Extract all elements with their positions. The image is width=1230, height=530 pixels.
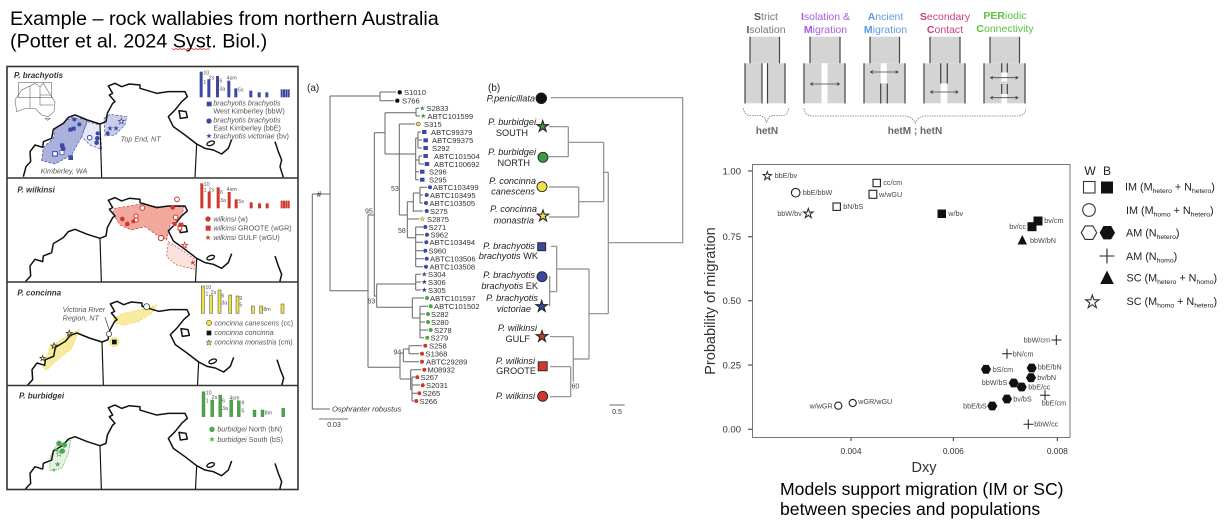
legend: wilkinsi: wilkinsi GULF (wGU) — [213, 234, 280, 242]
legend row: AM homo: AM (N — [1126, 251, 1157, 263]
tip labels: S2833 — [426, 104, 448, 113]
point labels: bbE/bbW — [803, 188, 832, 197]
markers: open circles — [791, 188, 856, 409]
y axis ticks — [722, 166, 752, 436]
point labels: w/wGR — [809, 402, 833, 410]
species labels: P. concinna — [490, 204, 537, 214]
legend: burbidgei: burbidgei North (bN) — [217, 426, 282, 434]
karyotype bars: brachyotis — [200, 71, 290, 97]
panel: (a) individual phylogeny — [307, 83, 480, 429]
tip labels: ABTC103506 — [430, 254, 476, 264]
y axis ticks: 0.00 — [722, 425, 741, 436]
panel: P. concinna map — [17, 285, 293, 395]
tip labels: S2031 — [426, 381, 448, 390]
legend row: SC homo hetero: + N — [1174, 296, 1194, 308]
point labels: bbE/bv — [775, 171, 797, 180]
tip labels — [332, 88, 480, 414]
karyotype bars: brachyotis: 3a — [219, 87, 225, 93]
support value: 60 — [572, 384, 579, 390]
legend row: SC homo hetero: SC (M — [1126, 296, 1157, 308]
bootstrap values: 53 — [391, 186, 399, 193]
diagram: ancient migration — [864, 37, 905, 104]
scale bar: 0.5 — [612, 409, 622, 416]
point labels: bbW/cc — [1034, 420, 1059, 428]
species labels: brachyotis EK — [481, 281, 539, 291]
tip labels: S266 — [420, 397, 437, 406]
long-branch break marks: # — [317, 190, 322, 199]
point labels: bbE/bN — [1038, 362, 1062, 372]
legend row: AM hetero: AM (N — [1126, 228, 1157, 240]
point labels: bbW/bN — [1030, 236, 1056, 245]
tip markers: bbW squares — [420, 130, 429, 182]
heading: Ancient Migration: Ancient — [868, 11, 903, 23]
tip labels: S2875 — [427, 215, 449, 224]
markers: plus signs — [1002, 335, 1062, 429]
markers: filled squares — [938, 210, 1042, 231]
legend: concinna: concinna canescens (cc) — [214, 319, 293, 327]
species tree branches — [549, 98, 683, 397]
species labels: canescens — [491, 186, 535, 196]
heading: Isolation and Migration: Isolation & — [801, 11, 850, 23]
legend: brachyotis — [206, 100, 289, 141]
inset map of Australia — [15, 83, 55, 120]
tip labels: S1010 — [404, 88, 426, 97]
species labels: P. burbidgei — [488, 117, 537, 127]
karyotype bars: concinna: 6 — [221, 293, 224, 299]
y axis title: Probability of migration — [703, 227, 719, 375]
heading: Secondary Contact: Secondary — [920, 11, 970, 23]
bootstrap values: 95 — [365, 208, 373, 216]
karyotype bars: wilkinsi: 4sm — [227, 187, 237, 193]
species labels: P. wilkinsi — [498, 323, 538, 333]
karyotype bars: burbidgei: 5 — [241, 408, 244, 414]
karyotype bars: brachyotis: 2s — [209, 75, 215, 81]
point labels: bv/bS — [1013, 394, 1032, 404]
bootstrap values: 63 — [368, 298, 375, 306]
caption: Models support migration (IM or SC) — [780, 479, 1064, 499]
tip labels: ABTC103505 — [430, 199, 475, 208]
legend: wilkinsi: wilkinsi (w) — [213, 215, 248, 223]
karyotype bars: burbidgei: 10 — [206, 391, 212, 397]
legend: brachyotis: brachyotis victoriae (bv) — [213, 133, 289, 141]
species name: P. wilkinsi — [17, 186, 56, 195]
point labels: bv/cc — [1009, 222, 1026, 231]
heading: Isolation and Migration: Migration — [804, 24, 847, 36]
diagram: secondary contact — [924, 37, 965, 104]
tip labels: S296 — [429, 168, 447, 176]
panel: (b) species tree — [479, 83, 683, 416]
tip labels: S282 — [431, 310, 449, 319]
map label: Kimberley: Kimberley, WA — [41, 167, 88, 175]
legend: concinna: concinna monastria (cm) — [214, 339, 293, 347]
species labels: P. wilkinsi — [496, 391, 536, 401]
legend: concinna: concinna concinna — [214, 329, 274, 337]
markers: open stars — [763, 172, 813, 218]
point labels: w/wGU — [878, 190, 902, 199]
brace: hetM hetN — [804, 108, 1026, 123]
tip labels: ABTC101597 — [430, 294, 476, 303]
panel: divergence scenario diagrams — [744, 10, 1034, 137]
point labels: bS/cm — [993, 365, 1013, 374]
species labels: P. burbidgei — [488, 147, 537, 157]
legend row: IM hetero hetero: hetero — [1192, 188, 1211, 195]
tip labels: ABTC99379 — [431, 128, 472, 137]
legend row: SC hetero homo: ) — [1214, 273, 1217, 285]
legend row: SC homo hetero: homo — [1157, 302, 1174, 310]
panel letter a: (a) — [307, 83, 319, 94]
species labels: P. brachyotis — [483, 270, 535, 280]
y axis ticks: 1.00 — [722, 166, 741, 178]
species labels: brachyotis WK — [479, 251, 539, 261]
tip labels: ABTC99375 — [432, 136, 473, 145]
legend: concinna — [206, 319, 293, 347]
tip labels: ABTC103494 — [430, 238, 475, 247]
tip labels: S258 — [429, 342, 447, 350]
legend: brachyotis: East Kimberley (bbE) — [213, 125, 281, 133]
tip labels: S960 — [428, 246, 446, 256]
legend row: SC hetero homo: SC (M — [1126, 273, 1157, 285]
legend: wilkinsi — [205, 215, 292, 242]
karyotype bars: concinna: 10 — [205, 285, 211, 291]
legend row: IM hetero hetero: IM (M — [1125, 182, 1153, 194]
tip labels: ABTC103495 — [430, 191, 476, 200]
karyotype bars: wilkinsi: 10 — [204, 182, 210, 188]
species name: P. burbidgei — [19, 391, 65, 400]
tip labels: ABTC100692 — [434, 160, 480, 169]
tip labels: S295 — [429, 176, 447, 184]
tip labels: S304 — [428, 270, 446, 279]
scale bar — [319, 419, 348, 429]
tip markers: burbidgei north — [425, 296, 433, 340]
scale bar: 0.03 — [327, 422, 341, 429]
legend row: AM homo — [1100, 248, 1177, 264]
tip labels: ABTC103508 — [430, 262, 475, 272]
legend row: SC hetero homo: hetero — [1157, 279, 1177, 286]
point labels: bv/cm — [1044, 216, 1063, 225]
karyotype bars: burbidgei: 4sm — [229, 395, 240, 401]
legend row: IM homo hetero: hetero — [1191, 212, 1210, 218]
species labels: SOUTH — [496, 128, 528, 138]
x axis ticks: 0.008 — [1047, 446, 1068, 456]
panel: species distribution maps — [7, 66, 298, 499]
legend: brachyotis: brachyotis brachyotis — [213, 100, 281, 108]
karyotype bars: concinna: 9 — [239, 296, 242, 302]
legend row: IM hetero hetero — [1084, 182, 1215, 195]
brace: hetN — [744, 108, 788, 123]
panel: P. brachyotis map — [14, 71, 290, 177]
legend row: SC hetero homo: + N — [1176, 273, 1196, 285]
karyotype bars: wilkinsi: 3a — [220, 198, 226, 204]
bootstrap values: 94 — [394, 350, 401, 356]
karyotype bars: wilkinsi: 5s — [238, 199, 244, 205]
legend row: AM hetero: hetero — [1157, 234, 1176, 241]
tip markers: bbE circles — [423, 185, 432, 269]
diagram: periodic connectivity — [984, 37, 1025, 104]
tip labels: S305 — [428, 286, 446, 295]
tip labels: S267 — [420, 373, 438, 382]
tree branches — [312, 92, 428, 409]
point labels: bN/cm — [1013, 350, 1033, 358]
legend row: AM hetero: ) — [1176, 228, 1179, 240]
y axis ticks: 0.50 — [722, 296, 741, 307]
panel: P. wilkinsi map — [17, 182, 292, 292]
title: Example – rock wallabies from northern Australia — [10, 8, 439, 30]
legend row: SC hetero homo — [1100, 270, 1217, 286]
tip labels: ABTC101504 — [434, 152, 480, 161]
species name: P. brachyotis — [14, 71, 64, 80]
tip labels: S280 — [431, 318, 449, 327]
tip labels: S315 — [424, 120, 442, 129]
legend row: IM hetero hetero: hetero — [1153, 188, 1172, 195]
y axis ticks: 0.25 — [722, 360, 741, 372]
legend: burbidgei — [209, 426, 283, 444]
label: hetN: hetN — [756, 126, 778, 137]
heading: Secondary Contact: Contact — [927, 24, 963, 36]
x axis ticks: 0.006 — [943, 446, 964, 456]
tip markers: burbidgei south — [420, 106, 426, 118]
map label: Victoria River: Region, NT — [63, 315, 99, 323]
karyotype bars: burbidgei: 8m — [265, 411, 273, 417]
tip labels: S306 — [428, 278, 446, 287]
karyotype bars: burbidgei: 3a — [222, 406, 228, 412]
tip labels: S1368 — [426, 350, 447, 358]
karyotype bars: brachyotis: 10 — [203, 71, 209, 77]
diagram: isolation and migration — [804, 37, 845, 104]
karyotype bars: concinna — [201, 285, 284, 313]
point labels: bbE/bS — [963, 402, 987, 410]
tip marker: concinna canescens — [416, 122, 420, 126]
tip labels: S278 — [434, 326, 452, 335]
tip marker: monastria star — [420, 216, 425, 221]
species labels: P. wilkinsi — [496, 356, 536, 366]
species labels: P.penicillata — [487, 94, 535, 104]
legend row: AM hetero — [1081, 226, 1179, 241]
species labels: P. concinna — [489, 176, 536, 186]
legend: brachyotis: brachyotis brachyotis — [213, 117, 281, 125]
scatter plot: probability of migration vs Dxy — [703, 164, 1070, 476]
tip markers: black — [395, 90, 402, 103]
karyotype bars: brachyotis: 5s — [238, 87, 244, 93]
caption: between species and populations — [780, 499, 1040, 519]
tip labels: ABTC101599 — [428, 112, 473, 121]
tip labels: ABTC29289 — [426, 358, 467, 366]
map label: Top End: Top End, NT — [121, 135, 161, 143]
plot frame — [752, 164, 1070, 438]
point labels: bv/bN — [1037, 373, 1056, 382]
karyotype bars: wilkinsi: 2s — [209, 187, 215, 193]
karyotype bars: brachyotis: 4sm — [227, 75, 237, 81]
species labels: GROOTE — [496, 366, 536, 376]
species markers — [536, 93, 549, 401]
legend row: SC homo hetero: hetero — [1194, 302, 1214, 310]
karyotype bars: burbidgei — [202, 391, 285, 417]
tip labels: S275 — [430, 207, 448, 216]
tip labels: S265 — [422, 389, 440, 398]
legend row: IM homo hetero — [1083, 204, 1214, 218]
point labels: w/bv — [947, 209, 963, 218]
species labels: NORTH — [498, 158, 530, 168]
legend row: IM homo hetero: ) — [1210, 205, 1214, 217]
point labels: bbW/bS — [982, 378, 1007, 387]
karyotype bars: wilkinsi: 1 — [204, 188, 207, 194]
map label: Victoria River: Victoria River — [63, 306, 105, 314]
legend row: AM homo: ) — [1174, 251, 1177, 263]
point labels: bbE/cc — [1028, 382, 1051, 392]
tip labels: ABTC101502 — [434, 302, 480, 311]
species labels: P. brachyotis — [486, 293, 538, 303]
markers: open squares — [833, 179, 880, 210]
legend row: AM homo: homo — [1157, 258, 1174, 264]
heading: Ancient Migration: Migration — [864, 24, 907, 36]
point labels: bN/bS — [843, 202, 863, 211]
karyotype bars: concinna: 1 — [205, 292, 208, 298]
tip markers: victoriae stars — [422, 272, 427, 292]
legend row: IM hetero hetero: ) — [1211, 182, 1215, 194]
x axis title: Dxy — [912, 460, 937, 476]
species labels — [479, 94, 539, 401]
bootstrap values: 58 — [398, 228, 406, 235]
species labels: victoriae — [497, 304, 531, 314]
karyotype bars: concinna: 3a — [221, 301, 227, 307]
karyotype bars: wilkinsi: 6 — [220, 190, 223, 196]
legend row: SC homo hetero — [1086, 295, 1217, 310]
heading: Strict Isolation: Isolation — [746, 24, 786, 36]
karyotype bars: concinna: 2s — [211, 290, 217, 296]
point labels: bbW/cm — [1024, 336, 1050, 344]
tip labels: M08932 — [428, 366, 455, 374]
karyotype bars: brachyotis: 6 — [219, 79, 222, 85]
karyotype bars: burbidgei: 2s — [212, 395, 218, 401]
species name: P. concinna — [17, 289, 62, 298]
point labels — [775, 171, 1066, 428]
heading: Periodic Connectivity: Connectivity — [976, 23, 1034, 35]
legend: brachyotis: West Kimberley (bbW) — [213, 108, 285, 116]
legend header: B — [1103, 164, 1111, 178]
karyotype bars: burbidgei: 6 — [222, 399, 225, 405]
karyotype bars: brachyotis: 1 — [203, 80, 206, 86]
karyotype bars: burbidgei: 1 — [206, 398, 209, 404]
legend: wilkinsi: wilkinsi GROOTE (wGR) — [213, 225, 292, 233]
point labels: cc/cm — [883, 178, 902, 187]
y axis ticks: 0.75 — [722, 232, 741, 243]
karyotype bars: concinna: 5 — [239, 303, 242, 309]
legend header: W — [1084, 164, 1096, 178]
x axis ticks: 0.004 — [841, 446, 862, 456]
bootstrap values — [365, 186, 406, 356]
tip labels: S766 — [402, 96, 420, 106]
legend row: IM hetero hetero: + N — [1172, 182, 1192, 194]
label: hetM hetN: hetM ; hetN — [888, 126, 942, 137]
legend row: SC hetero homo: homo — [1196, 279, 1214, 286]
species labels: monastria — [494, 216, 534, 226]
legend: burbidgei: burbidgei South (bS) — [217, 436, 283, 444]
karyotype bars: burbidgei: 9 — [241, 401, 244, 407]
point labels: bbE/cm — [1042, 398, 1066, 408]
species labels: P. brachyotis — [483, 241, 535, 251]
tip labels: ABTC103499 — [433, 183, 479, 192]
legend row: SC homo hetero: ) — [1214, 296, 1217, 308]
tip labels: S292 — [432, 144, 450, 153]
karyotype bars: concinna: 8m — [263, 307, 271, 313]
scale bar — [609, 405, 625, 416]
legend row: IM homo hetero: IM (M — [1126, 205, 1154, 217]
legend row: IM homo hetero: homo — [1154, 212, 1171, 218]
diagram: strict isolation — [745, 37, 786, 104]
tip labels: S279 — [430, 334, 448, 342]
point labels: wGR/wGU — [857, 397, 892, 406]
legend: model symbols — [1081, 164, 1217, 310]
markers: filled hexagons — [981, 364, 1037, 410]
tip labels: S962 — [430, 230, 448, 240]
legend header — [1084, 164, 1111, 178]
legend row: IM homo hetero: + N — [1171, 205, 1191, 217]
species labels: GULF — [505, 334, 530, 344]
heading: Strict Isolation: Strict — [754, 11, 778, 23]
point labels: bbW/bv — [777, 209, 802, 218]
title: (Potter et al. 2024 Syst. Biol.) — [10, 30, 267, 52]
tip labels: S271 — [428, 223, 446, 232]
x axis ticks — [841, 438, 1068, 456]
marker: filled triangle — [1018, 235, 1027, 244]
tip labels: Osphranter robustus — [332, 404, 401, 414]
karyotype bars: wilkinsi — [200, 182, 290, 208]
panel letter b: (b) — [488, 83, 500, 94]
heading: Periodic Connectivity: PERiodic — [983, 10, 1027, 22]
title — [10, 8, 439, 52]
panel: P. burbidgei map — [19, 391, 285, 499]
tip markers: wilkinsi — [414, 344, 427, 403]
